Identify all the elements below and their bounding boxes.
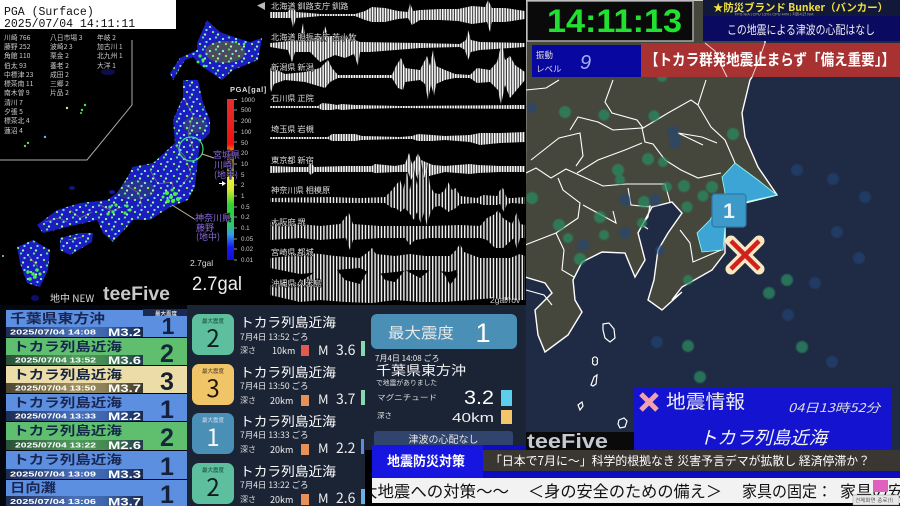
- text: top PGA station list: 清川 7: [4, 97, 23, 107]
- text: top PGA station list: 大洋 1: [97, 60, 116, 70]
- text: quake time and place: で地震がありました: [376, 377, 437, 387]
- legend: PGA colour bar: 2: [241, 182, 245, 189]
- badge: max intensity: [371, 314, 517, 349]
- icon: collapse triangle: [257, 2, 265, 10]
- legend: PGA colour bar: 100: [241, 129, 252, 136]
- text: top PGA station list: 中標津 23: [4, 69, 34, 79]
- list row: Tokara 13:52: 2025/07/04 13:52: [15, 356, 96, 364]
- text: quake time and place: [375, 353, 466, 387]
- map: Japan: [2, 20, 262, 301]
- icon: intensity badge 1: [712, 194, 746, 227]
- label: Miyagi station: (地中): [214, 168, 238, 181]
- text: top PGA station list: 加古川 1: [97, 41, 123, 51]
- list row: Chiba 14:08: M3.2: [108, 327, 141, 339]
- panel: vibration level: 9: [580, 52, 591, 74]
- map: faint blue dots: [527, 103, 871, 409]
- panel: earthquake list: [0, 305, 190, 506]
- list row: Tokara 13:52: 2: [160, 340, 174, 368]
- list row: Tokara 13:09: 2025/07/04 13:09: [10, 470, 96, 478]
- legend: PGA colour bar: [227, 85, 267, 264]
- text: top PGA station list: 片品 2: [50, 87, 69, 97]
- text: station labels: 東京都 新宿: [271, 154, 314, 166]
- panel: vibration level: レベル: [536, 63, 562, 75]
- text: issue time: 04日13時52分: [788, 399, 882, 416]
- list row: Tokara 13:22: 2: [160, 424, 174, 452]
- label: leader lines: [172, 154, 214, 220]
- icon: pink cross: [641, 394, 657, 410]
- label: Miyagi station: 宮城県: [213, 148, 240, 161]
- heading: disaster prevention label: [372, 445, 483, 478]
- card: 13:33 quake: 最大震度: [202, 416, 224, 424]
- card: 13:52 quake: トカラ列島近海: [240, 312, 336, 331]
- label: exit fullscreen hint: [853, 495, 899, 505]
- text: station labels: 大阪府 堺: [271, 216, 306, 228]
- card: 13:52 quake: M: [318, 340, 329, 359]
- card: 13:33 quake: トカラ列島近海: [240, 411, 336, 430]
- map: green intensity clusters: [26, 41, 245, 281]
- legend: PGA colour bar: 20: [241, 150, 248, 157]
- text: quake time and place: 千葉県東方沖: [376, 360, 466, 379]
- list row: Chiba 14:08: 2025/07/04 14:08: [10, 328, 96, 336]
- card: 13:22 quake: トカラ列島近海: [240, 461, 336, 480]
- list row: Tokara 13:50: [6, 366, 190, 396]
- list row: Tokara 13:52: [6, 338, 190, 368]
- card: 13:22 quake: 20km: [270, 493, 293, 506]
- label: exit fullscreen hint: 전체화면 종료(f): [855, 497, 894, 503]
- list row: Tokara 13:33: トカラ列島近海: [13, 395, 123, 410]
- text: top PGA station list: 八日市場 3: [50, 32, 83, 42]
- label: sponsor line: ★防災ブランド Bunker（バンカー）: [713, 0, 888, 15]
- card: 13:52 quake: 最大震度: [202, 317, 224, 325]
- map: observation dots: [526, 72, 808, 383]
- legend: PGA colour bar: PGA[gal]: [230, 85, 267, 94]
- card: 13:33 quake: 深さ: [240, 444, 256, 455]
- icon: pink sticker: [873, 480, 888, 492]
- label: Kanagawa station: (地中): [196, 230, 220, 243]
- panel: earthquake info box: [634, 387, 892, 450]
- list row: Chiba 14:08: 千葉県東方沖: [10, 311, 105, 326]
- text: scrolling ticker: [361, 478, 900, 503]
- legend: PGA colour bar: 10: [241, 161, 248, 168]
- text: top PGA station list: 波崎2 3: [50, 41, 73, 51]
- text: top PGA station list: 成田 2: [50, 69, 69, 79]
- legend: PGA colour bar: 0.1: [241, 225, 250, 232]
- text: large PGA value: 2.7gal: [192, 274, 242, 295]
- card: 13:52 quake: 3.6: [336, 340, 356, 360]
- list row: Tokara 13:22: M2.6: [108, 440, 141, 452]
- text: top PGA station list: 標茶北 4: [4, 115, 30, 125]
- map: southern islands: [2, 69, 115, 301]
- text: station labels: 北海道 胆振支庁 苫小牧: [271, 31, 357, 43]
- heading: PGA timestamp box: PGA (Surface): [4, 6, 94, 19]
- icon: intensity badge 1: 1: [723, 200, 735, 223]
- card: 13:52 quake: [192, 312, 365, 360]
- card: 13:22 quake: [192, 461, 365, 506]
- label: Miyagi station: [213, 148, 240, 181]
- text: top PGA station list: 年岐 2: [97, 32, 116, 42]
- card: 13:33 quake: 2.2: [336, 438, 356, 458]
- clock: 14:11:13: [547, 3, 682, 39]
- list row: Tokara 13:52: M3.6: [108, 355, 141, 367]
- icon: Miyagi marker circle: [179, 137, 203, 161]
- text: tsunami notice: [703, 16, 900, 41]
- card: 13:50 quake: トカラ列島近海: [240, 362, 336, 381]
- legend: PGA colour bar: 0.05: [241, 236, 254, 243]
- text: top PGA station list: 栗金 2: [50, 50, 69, 60]
- card: 13:33 quake: 7月4日 13:33 ごろ: [240, 429, 308, 441]
- card: 13:50 quake: 20km: [270, 394, 293, 407]
- badge: max intensity: 1: [475, 318, 491, 348]
- legend: PGA colour bar: 0.01: [241, 257, 254, 264]
- legend: PGA colour bar: 50: [241, 140, 248, 147]
- chart: waveform traces: [270, 0, 525, 180]
- text: magnitude value: 3.2: [464, 388, 494, 409]
- card: 13:50 quake: 最大震度: [202, 367, 224, 375]
- badge: no tsunami: 津波の心配なし: [408, 431, 478, 446]
- card: 13:33 quake: 20km: [270, 443, 293, 456]
- text: magnitude value: マグニチュード: [377, 392, 437, 403]
- card: 13:50 quake: 3: [206, 369, 220, 404]
- text: headline banner: [641, 43, 900, 77]
- text: station labels: 埼玉県 岩槻: [271, 123, 314, 135]
- heading: PGA timestamp box: [0, 0, 176, 31]
- text: small PGA value: 2.7gal: [190, 258, 213, 268]
- map: land masses: [525, 0, 777, 428]
- card: 13:50 quake: M: [318, 389, 329, 408]
- panel: Kanto intensity map: [525, 0, 900, 450]
- panel: PGA map: [0, 0, 270, 305]
- card: 13:22 quake: 深さ: [240, 494, 256, 505]
- card: 13:50 quake: 3.7: [336, 389, 356, 409]
- list row: Tokara 13:33: [6, 394, 190, 424]
- list row: Hyuganada 13:06: 2025/07/04 13:06: [10, 497, 96, 506]
- text: top PGA station list: 角館 110: [4, 50, 31, 60]
- heading: max intensity header: [143, 309, 190, 318]
- list row: Tokara 13:50: M3.7: [108, 383, 141, 395]
- legend: PGA colour bar: 500: [241, 107, 252, 114]
- legend: PGA colour bar: 5: [241, 172, 245, 179]
- text: scrolling ticker: 大地震への対策〜〜: [361, 478, 509, 502]
- card: 13:50 quake: 深さ: [240, 395, 256, 406]
- list row: Tokara 13:09: 1: [160, 453, 174, 481]
- card: 13:50 quake: [192, 362, 365, 409]
- label: Kanagawa station: 藤野: [196, 221, 214, 234]
- text: quake time and place: 7月4日 14:08 ごろ: [375, 353, 439, 364]
- text: top PGA station list: 川崎 766: [4, 32, 31, 42]
- text: top PGA station list: 標茶南 11: [4, 78, 34, 88]
- text: station labels: 神奈川県 相模原: [271, 184, 330, 196]
- list row: Tokara 13:50: 3: [160, 368, 174, 396]
- label: Kanagawa station: 神奈川県: [195, 211, 231, 224]
- panel: top-right overlays: [527, 0, 900, 77]
- legend: PGA colour bar: 0.5: [241, 204, 250, 211]
- list row: Tokara 13:33: 2025/07/04 13:33: [15, 412, 96, 420]
- badge: max intensity: 最大震度: [388, 322, 454, 343]
- list row: Tokara 13:22: 2025/07/04 13:22: [15, 440, 96, 450]
- card: 13:52 quake: 深さ: [240, 345, 256, 356]
- heading: earthquake info: 地震情報: [666, 387, 745, 414]
- text: depth value: [377, 410, 512, 425]
- chart: large amplitude traces: [270, 160, 525, 303]
- text: scrolling ticker: ＜身の安全のための備え＞: [528, 478, 722, 502]
- card: 13:52 quake: 10km: [272, 344, 295, 357]
- panel: latest quake detail: [365, 305, 526, 450]
- text: station labels: 新潟県 新潟: [271, 61, 314, 73]
- text: region: トカラ列島近海: [699, 424, 830, 450]
- list row: Tokara 13:50: 2025/07/04 13:50: [15, 384, 96, 392]
- list row: Tokara 13:09: トカラ列島近海: [13, 452, 123, 467]
- map: Chiba intensity area: [697, 163, 777, 252]
- list row: Tokara 13:09: [6, 451, 190, 481]
- card: 13:52 quake: 2: [206, 319, 220, 354]
- card: 13:22 quake: 最大震度: [202, 466, 224, 474]
- text: top PGA station list: 夕張 5: [4, 106, 23, 116]
- map: prefecture borders: [525, 80, 735, 305]
- text: station labels: 石川県 正院: [271, 92, 314, 104]
- card: 13:52 quake: 7月4日 13:52 ごろ: [240, 331, 308, 343]
- text: station labels: [271, 0, 357, 289]
- icon: epicentre cross: [731, 241, 759, 269]
- list row: Tokara 13:52: トカラ列島近海: [13, 339, 123, 354]
- legend: PGA colour bar: 1000: [241, 97, 255, 104]
- list row: Tokara 13:50: トカラ列島近海: [13, 367, 123, 382]
- card: 13:33 quake: M: [318, 438, 329, 457]
- legend: PGA colour bar: 200: [241, 118, 252, 125]
- text: scrolling ticker: 家具の固定：: [742, 478, 832, 502]
- panel: vibration level: [532, 45, 642, 77]
- text: waveform scale: 2gal/rov: [490, 295, 521, 305]
- text: underground new label: 地中 NEW: [50, 290, 94, 305]
- card: 13:22 quake: 2: [206, 468, 220, 503]
- list row: Hyuganada 13:06: [6, 480, 190, 506]
- text: top PGA station list: 養老 2: [50, 60, 69, 70]
- list row: Tokara 13:22: [6, 422, 190, 452]
- text: depth value: 深さ: [377, 410, 392, 421]
- card: 13:33 quake: 1: [206, 418, 220, 453]
- label: sponsor line: FPS N/A | CPU 13% | CPU 44% | 지원시간 N/A: [735, 12, 814, 16]
- panel: vibration level: 振動: [536, 49, 553, 61]
- card: 13:22 quake: 7月4日 13:22 ごろ: [240, 479, 308, 491]
- badge: no tsunami: [374, 431, 513, 447]
- list row: Chiba 14:08: 1: [162, 313, 175, 339]
- list row: Tokara 13:09: M3.3: [108, 469, 141, 481]
- text: top PGA station list: 南木曽 9: [4, 87, 30, 97]
- text: station labels: 宮崎県 都城: [271, 246, 314, 258]
- clock: [527, 1, 693, 41]
- text: top PGA station list: [4, 32, 123, 135]
- list row: Tokara 13:22: トカラ列島近海: [13, 423, 123, 438]
- icon: current level arrow: [219, 181, 226, 186]
- text: station labels: 沖縄県 久米島: [271, 277, 322, 289]
- list row: Chiba 14:08: [6, 310, 190, 339]
- logo: teeFive: teeFive: [527, 431, 608, 453]
- text: top PGA station list: 藤野 252: [4, 41, 31, 51]
- list row: Tokara 13:33: M2.2: [108, 411, 141, 423]
- panel: seismic waveforms: [270, 0, 526, 305]
- panel: logo strip: [526, 431, 635, 453]
- text: headline: 「日本で7月に〜」科学的根拠なき 災害予言デマが拡散し 経済停滞か？: [490, 452, 870, 469]
- legend: PGA colour bar: 1: [241, 193, 245, 200]
- text: top PGA station list: 蓮沼 4: [4, 125, 23, 135]
- heading: max intensity header: 最大震度: [155, 310, 177, 318]
- text: top PGA station list: 北九州 1: [97, 50, 123, 60]
- legend: PGA colour bar: 0.02: [241, 246, 254, 253]
- card: 13:50 quake: 7月4日 13:50 ごろ: [240, 380, 308, 392]
- label: inset divider: [0, 40, 132, 160]
- list row: Hyuganada 13:06: 日向灘: [10, 480, 57, 495]
- text: depth value: 40km: [452, 411, 494, 425]
- label: Miyagi station: 川崎: [214, 158, 232, 171]
- text: magnitude value: [377, 388, 512, 409]
- heading: PGA timestamp box: 2025/07/04 14:11:11: [4, 18, 135, 31]
- text: top PGA station list: 三郷 2: [50, 78, 69, 88]
- card: 13:33 quake: [192, 411, 364, 458]
- panel: news ticker: [361, 445, 900, 505]
- panel: recent quake cards: [187, 305, 365, 506]
- text: top PGA station list: 伯太 93: [4, 60, 27, 70]
- heading: disaster prevention label: 地震防災対策: [387, 450, 465, 470]
- text: station labels: 北海道 釧路支庁 釧路: [271, 0, 348, 12]
- label: Kanagawa station: [195, 211, 231, 243]
- legend: PGA colour bar: 0.2: [241, 214, 250, 221]
- list row: Tokara 13:33: 1: [160, 396, 174, 424]
- logo: teeFive left: teeFive: [103, 284, 170, 305]
